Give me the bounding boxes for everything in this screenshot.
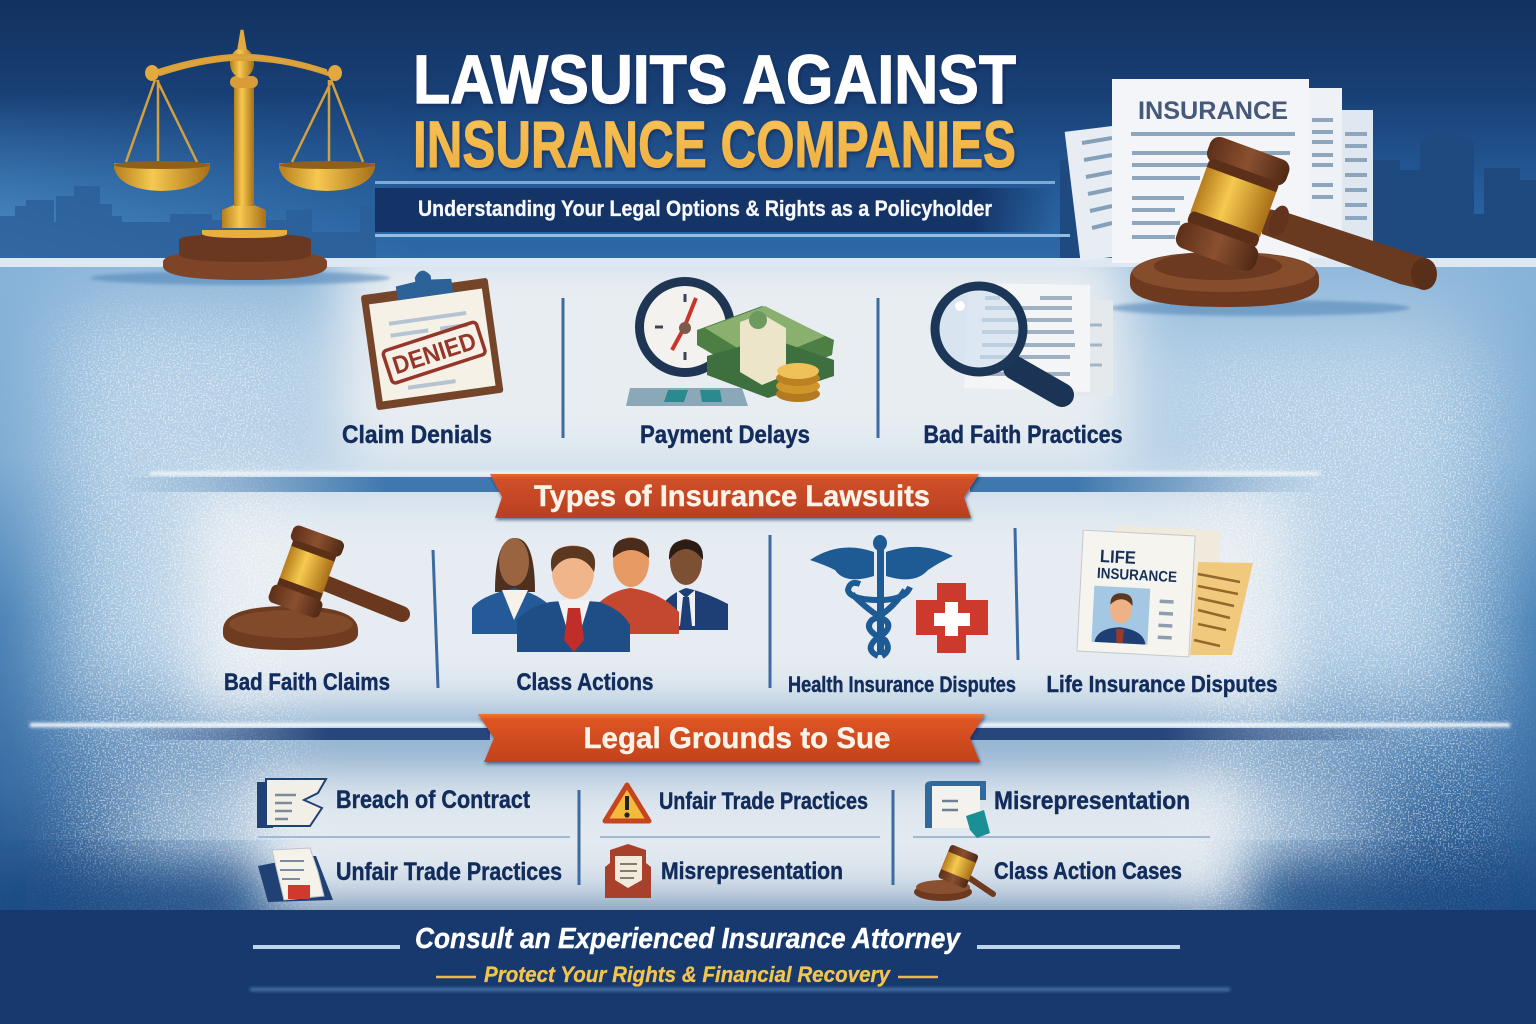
icon: magnifier over documents (935, 283, 1113, 396)
banner: types of insurance lawsuits: Types of Insurance Lawsuits (534, 480, 930, 513)
icon: insurance documents and gavel (1065, 79, 1437, 307)
label: life insurance disputes: Life Insurance Disputes (1046, 671, 1278, 697)
icon: scales of justice (114, 30, 375, 280)
subtitle banner (375, 181, 1070, 237)
icon: group of people (472, 537, 728, 652)
label: bad faith claims: Bad Faith Claims (224, 669, 390, 696)
skyline left (0, 186, 376, 258)
label: breach of contract: Breach of Contract (336, 786, 531, 814)
row 3: legal grounds (257, 779, 1190, 902)
label: unfair trade practices: Unfair Trade Practices (659, 788, 868, 815)
icon: life insurance documents (1077, 525, 1253, 657)
footer call to action (253, 923, 1180, 987)
icon: warning triangle (605, 785, 649, 821)
footer call to action: Consult an Experienced Insurance Attorney (415, 923, 962, 955)
label: claim denials: Claim Denials (342, 421, 492, 449)
label: misrepresentation: Misrepresentation (994, 787, 1190, 815)
footer call to action: Protect Your Rights & Financial Recovery (484, 962, 892, 987)
title: INSURANCE COMPANIES (413, 107, 1016, 181)
skyline right (1060, 128, 1536, 258)
icon: denied clipboard (358, 262, 504, 410)
label: unfair trade practices 2: Unfair Trade Practices (336, 858, 562, 886)
icon: clock and money (626, 277, 834, 406)
title (413, 41, 1016, 181)
label: class action cases: Class Action Cases (994, 858, 1182, 885)
icon: small gavel (914, 844, 993, 901)
icon: caduceus and red cross (810, 535, 988, 656)
icon: life insurance documents: INSURANCE (1097, 565, 1177, 586)
icon: gavel (223, 524, 402, 650)
icon: insurance documents and gavel: INSURANCE (1138, 97, 1288, 125)
label: class actions: Class Actions (516, 669, 654, 696)
icon: denied clipboard: DENIED (389, 327, 480, 380)
icon: policy folder (258, 848, 333, 902)
label: bad faith practices: Bad Faith Practices (924, 421, 1122, 449)
banner: legal grounds to sue: Legal Grounds to Sue (584, 722, 890, 755)
icon: document with pointer (925, 781, 990, 838)
subtitle banner: Understanding Your Legal Options & Rights as a Policyholder (418, 196, 992, 221)
icon: life insurance documents: LIFE (1099, 546, 1136, 568)
label: payment delays: Payment Delays (640, 421, 810, 449)
label: misrepresentation 2: Misrepresentation (661, 858, 843, 885)
row 1: common issues (342, 262, 1122, 449)
title: LAWSUITS AGAINST (413, 41, 1016, 118)
icon: red envelope (605, 844, 651, 898)
row 2: lawsuit types (223, 524, 1278, 697)
banner: types of insurance lawsuits (490, 474, 979, 518)
icon: torn contract (257, 779, 326, 828)
label: health insurance disputes: Health Insurance Disputes (788, 672, 1016, 697)
banner: legal grounds to sue (478, 714, 985, 762)
